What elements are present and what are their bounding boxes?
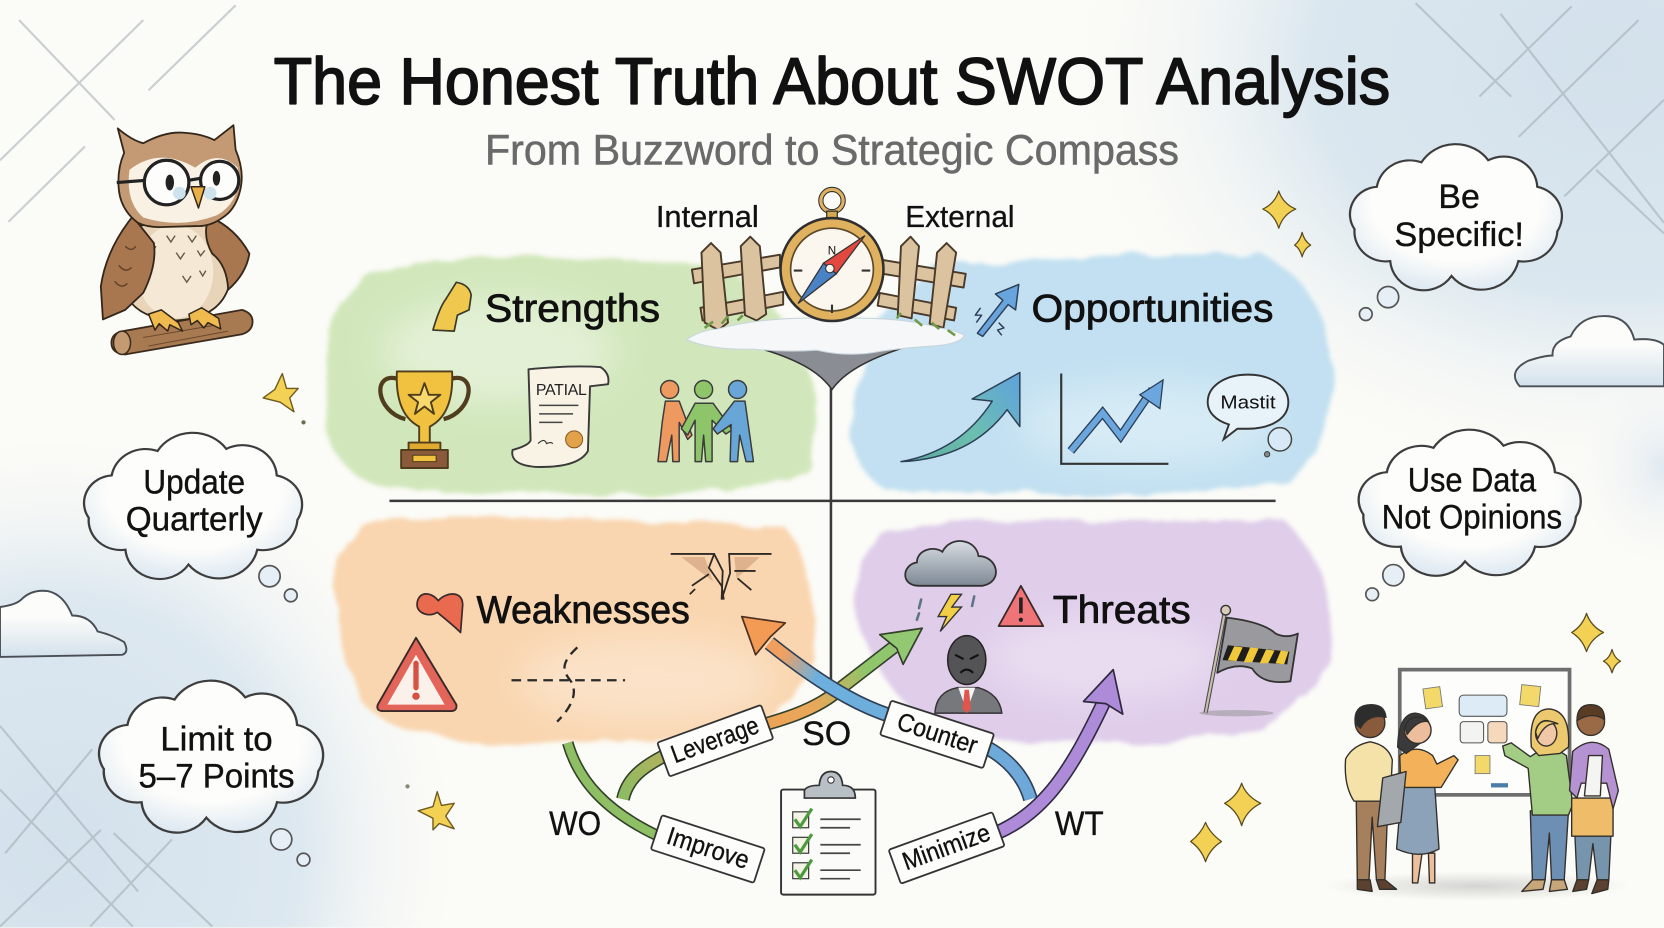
icon: three people xyxy=(658,380,753,462)
quadrant axes xyxy=(389,366,1276,695)
icon: certificate scroll xyxy=(512,366,608,467)
person three xyxy=(1503,709,1573,891)
strategy label: SO: SO xyxy=(802,715,851,753)
fences xyxy=(692,237,966,330)
beak xyxy=(191,187,205,208)
thought bubble: update quarterly: Update xyxy=(143,463,245,501)
icon: speech bubble xyxy=(1208,375,1292,457)
panel: weaknesses background xyxy=(334,518,815,743)
thought bubble: use data: Use Data xyxy=(1408,461,1536,499)
arrow: counter to weaknesses xyxy=(742,617,1030,799)
icon: trophy xyxy=(380,371,469,468)
person one xyxy=(1345,705,1397,891)
thought bubble: limit points xyxy=(99,681,323,866)
feet xyxy=(149,308,221,331)
icon: warning flag xyxy=(1199,605,1298,716)
tag: minimize: Minimize xyxy=(899,819,994,876)
star cluster: left top xyxy=(263,374,306,424)
sparkles: top centre right xyxy=(1263,191,1311,257)
whiteboard xyxy=(1400,670,1570,795)
strategy label: WO: WO xyxy=(549,805,601,843)
panel: strengths xyxy=(380,282,753,468)
label: internal: Internal xyxy=(656,199,759,234)
subtitle: From Buzzword to Strategic Compass xyxy=(485,126,1179,173)
right wing hand xyxy=(206,216,249,290)
label: external: External xyxy=(905,199,1015,234)
icon: owl on a log xyxy=(101,125,253,354)
icon: compass on fenced island: N xyxy=(828,245,836,258)
thought bubble: use data: Not Opinions xyxy=(1382,498,1562,536)
title: The Honest Truth About SWOT Analysis xyxy=(274,44,1390,118)
ground shadow xyxy=(1323,871,1631,901)
arrow: leverage to SO xyxy=(623,628,922,799)
icon: broken heart xyxy=(417,594,463,632)
glasses xyxy=(144,160,189,205)
icon: ground crack xyxy=(671,554,772,600)
thought bubble: update quarterly: Quarterly xyxy=(126,501,263,539)
icon: certificate scroll: PATIAL xyxy=(536,382,587,399)
panel: threats xyxy=(905,541,1298,716)
strategy label: WT: WT xyxy=(1055,805,1104,843)
heading: threats: Threats xyxy=(1053,588,1191,632)
sparkles: bottom centre right xyxy=(1191,783,1261,862)
icon: warning triangle xyxy=(377,638,456,711)
icon: storm cloud xyxy=(905,541,996,631)
thought bubble: be specific: Specific! xyxy=(1394,216,1524,254)
arrow: WO improve xyxy=(568,743,663,838)
thought bubble: update quarterly xyxy=(84,433,302,602)
icon: rocket arrow xyxy=(975,284,1019,336)
decorative cloud: left xyxy=(0,591,126,657)
heading: strengths: Strengths xyxy=(485,287,660,331)
heading: weaknesses: Weaknesses xyxy=(476,588,690,632)
icon: line chart xyxy=(1061,374,1168,464)
island snow xyxy=(687,318,965,354)
icon: clipboard checklist xyxy=(781,772,876,895)
left wing xyxy=(101,216,154,319)
compass body xyxy=(821,189,843,212)
icon: threat warning sign xyxy=(999,586,1043,626)
thought bubble: limit points: 5–7 Points xyxy=(138,757,294,795)
tag: improve: Improve xyxy=(663,822,753,875)
person four xyxy=(1570,705,1618,894)
person two xyxy=(1377,713,1458,883)
head xyxy=(118,125,242,227)
tag: leverage: Leverage xyxy=(667,711,763,769)
icon: speech bubble: Mastit xyxy=(1220,393,1276,413)
sparkles: right xyxy=(1572,613,1620,673)
body xyxy=(121,222,230,320)
icon: competitor figure xyxy=(935,636,1002,713)
panel: opportunities background xyxy=(851,255,1333,495)
arrow: minimize to WT xyxy=(996,670,1123,833)
log xyxy=(111,310,253,354)
island rock xyxy=(759,348,902,389)
thought bubble: limit points: Limit to xyxy=(160,720,273,758)
star cluster: left bottom xyxy=(405,784,454,830)
icon: big growth arrow xyxy=(901,372,1020,462)
panel: strengths background xyxy=(326,257,815,494)
tag: counter xyxy=(880,700,994,768)
tag: counter: Counter xyxy=(894,708,981,760)
thought bubble: be specific xyxy=(1350,144,1562,320)
panel: threats background xyxy=(854,520,1331,743)
icon: flexed arm xyxy=(433,282,471,331)
tag: improve xyxy=(651,815,765,883)
panel: weaknesses xyxy=(377,554,772,722)
heading: opportunities: Opportunities xyxy=(1032,287,1273,331)
decorative cloud: right xyxy=(1515,316,1664,386)
thought bubble: be specific: Be xyxy=(1438,178,1480,216)
icon: dashed crossroads xyxy=(512,647,625,722)
thought bubble: use data xyxy=(1359,430,1581,601)
panel: opportunities xyxy=(901,284,1292,464)
icon: compass on fenced island xyxy=(687,189,966,389)
illustration: team at whiteboard xyxy=(1323,670,1631,901)
